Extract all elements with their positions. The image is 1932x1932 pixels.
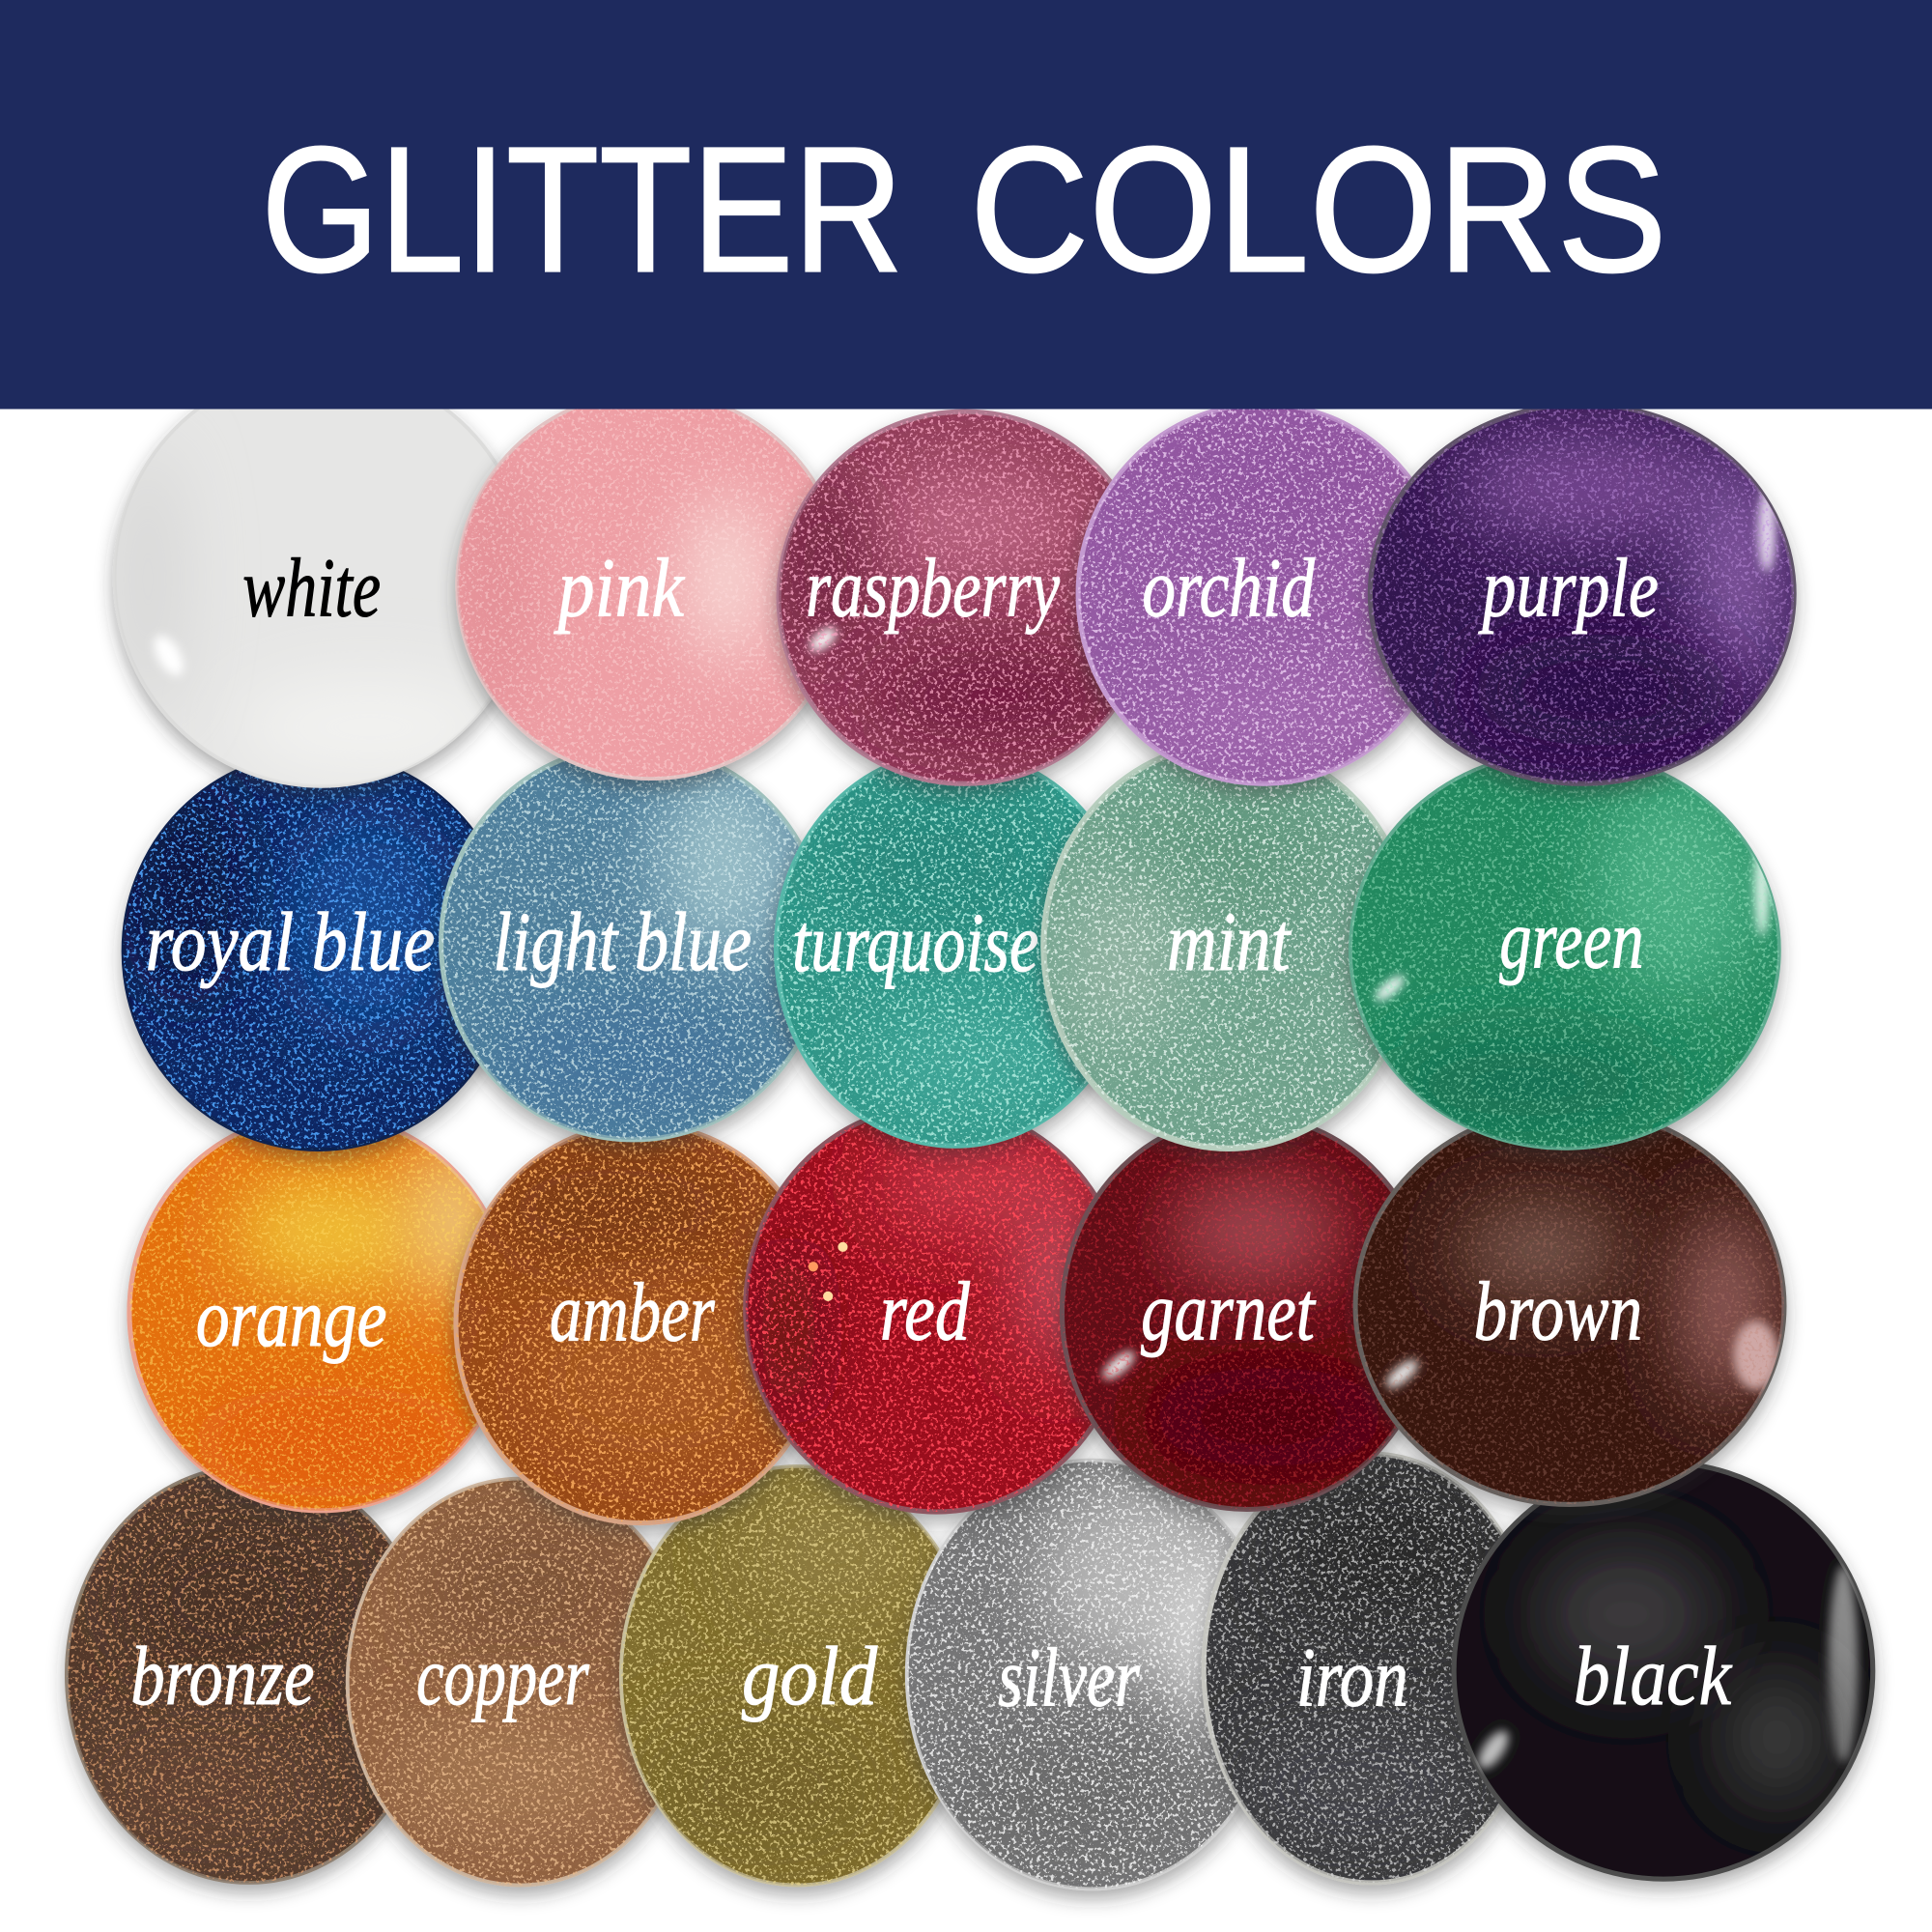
title: GLITTER	[261, 111, 903, 310]
swatch: garnet	[1062, 1115, 1432, 1509]
label: garnet: garnet	[1141, 1264, 1316, 1357]
label: orchid: orchid	[1142, 542, 1315, 635]
label: mint: mint	[1167, 895, 1292, 988]
swatch: orchid	[1078, 404, 1448, 783]
label: iron: iron	[1296, 1631, 1408, 1723]
swatch: gold	[621, 1466, 974, 1886]
label: bronze: bronze	[130, 1630, 314, 1722]
header banner	[0, 0, 1932, 409]
label: amber: amber	[550, 1266, 715, 1359]
label: purple: purple	[1478, 542, 1659, 635]
label: red: red	[880, 1264, 970, 1357]
swatch: green	[1350, 752, 1779, 1149]
swatch: purple	[1370, 404, 1794, 783]
swatch: pink	[457, 392, 844, 779]
swatch: bronze	[67, 1466, 431, 1883]
swatch: mint	[1043, 744, 1413, 1149]
label: gold: gold	[742, 1630, 878, 1722]
label: white: white	[242, 542, 381, 635]
swatch: light blue	[441, 746, 826, 1140]
swatch: copper	[348, 1479, 693, 1886]
swatch: raspberry	[779, 412, 1151, 783]
swatch: royal blue	[117, 753, 513, 1150]
swatch: turquoise	[777, 752, 1133, 1146]
label: brown: brown	[1474, 1264, 1642, 1357]
swatch: black	[1454, 1463, 1873, 1879]
label: turquoise: turquoise	[792, 896, 1038, 989]
title: COLORS	[970, 111, 1667, 310]
swatch: brown	[1355, 1108, 1784, 1504]
swatch: iron	[1204, 1454, 1539, 1883]
swatch: red	[746, 1105, 1127, 1512]
swatch: orange	[129, 1114, 511, 1511]
label: light blue: light blue	[493, 895, 752, 988]
swatch: silver	[907, 1460, 1288, 1889]
label: orange: orange	[196, 1271, 387, 1364]
swatch: white	[115, 367, 528, 786]
swatch: amber	[456, 1123, 826, 1523]
label: raspberry: raspberry	[806, 542, 1060, 635]
label: green: green	[1499, 893, 1644, 985]
label: silver: silver	[998, 1631, 1140, 1723]
label: royal blue: royal blue	[146, 895, 435, 988]
label: copper: copper	[416, 1630, 589, 1722]
label: pink: pink	[554, 542, 685, 635]
label: black: black	[1574, 1630, 1732, 1722]
